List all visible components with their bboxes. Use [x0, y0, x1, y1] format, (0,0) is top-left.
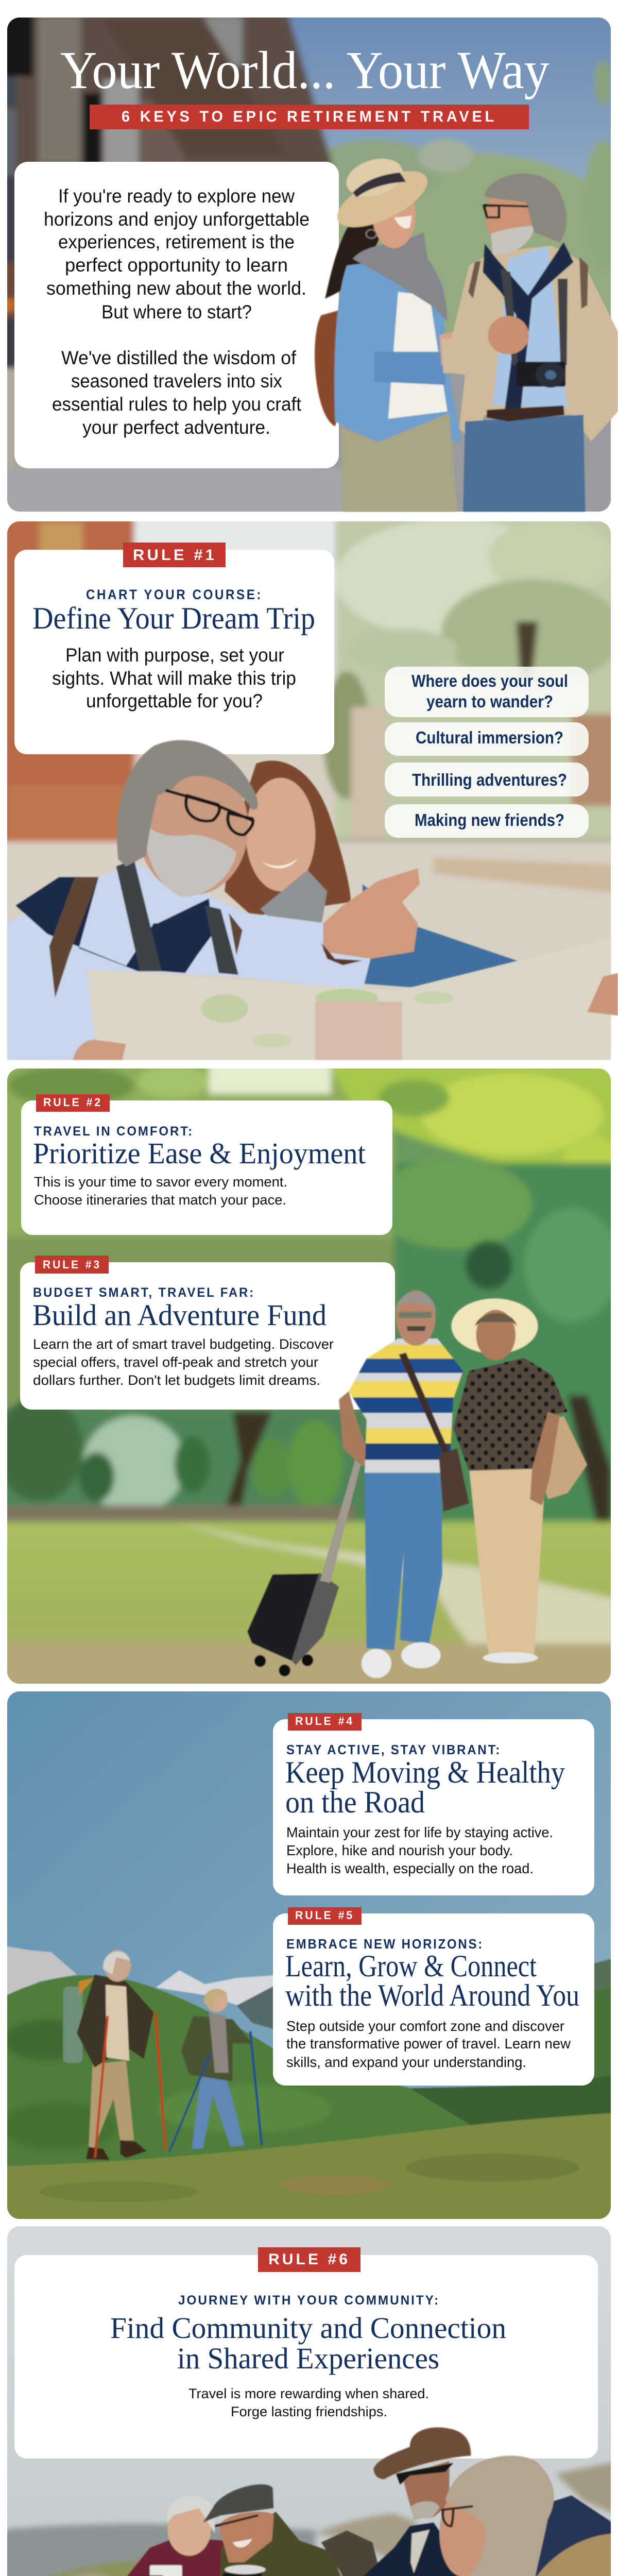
card text: Plan with purpose, set your — [65, 645, 284, 666]
intro text: something new about the world. — [46, 278, 306, 299]
white card: rule 4 — [273, 1719, 594, 1895]
rule 4 content: Keep Moving & Healthy — [285, 1755, 565, 1789]
card text: sights. What will make this trip — [52, 668, 296, 689]
rule 4 content: STAY ACTIVE, STAY VIBRANT: — [286, 1742, 501, 1757]
panel: rules 4 and 5 — [7, 1691, 611, 2219]
intro text: But where to start? — [101, 301, 252, 323]
intro text: experiences, retirement is the — [58, 231, 295, 252]
photo: couple reading a map — [7, 740, 618, 1060]
rule tag — [123, 543, 226, 567]
suitcase — [248, 1454, 364, 1676]
photo: friends sharing a toast — [127, 2427, 611, 2576]
card text: JOURNEY WITH YOUR COMMUNITY: — [178, 2293, 440, 2308]
photo background: plaza with brick building and trees — [0, 515, 618, 1062]
rule tag — [258, 2247, 360, 2272]
rule 3 content — [32, 1256, 334, 1388]
man — [7, 740, 420, 1060]
rule 2 content: This is your time to savor every moment. — [34, 1174, 287, 1190]
panel: rules 2 and 3 — [7, 1069, 611, 1684]
card text: CHART YOUR COURSE: — [86, 587, 263, 602]
hiker man — [63, 1950, 167, 2160]
rule 2 content — [33, 1094, 366, 1208]
rule 4 content: on the Road — [285, 1785, 425, 1819]
rule 5 content: Learn, Grow & Connect — [285, 1949, 537, 1983]
rule 2 content: Choose itineraries that match your pace. — [34, 1192, 286, 1208]
question pills: Cultural immersion? — [416, 728, 563, 747]
card text: in Shared Experiences — [177, 2342, 439, 2375]
man in olive jacket — [203, 2483, 342, 2576]
intro text: perfect opportunity to learn — [65, 255, 288, 276]
woman — [315, 151, 475, 512]
card text: Travel is more rewarding when shared. — [188, 2386, 429, 2401]
white card: rule 2 — [21, 1100, 392, 1235]
subtitle banner — [90, 105, 529, 129]
woman in burgundy — [127, 2496, 225, 2576]
white card: rule 5 — [273, 1913, 594, 2086]
rule 4 content: Explore, hike and nourish your body. — [286, 1842, 513, 1858]
rule 2 content: TRAVEL IN COMFORT: — [34, 1124, 194, 1139]
card text: Define Your Dream Trip — [32, 601, 315, 635]
panel: rule 1 — [6, 521, 618, 1061]
question pills: Thrilling adventures? — [412, 770, 567, 789]
title: Your World... Your Way — [60, 41, 550, 100]
panel: rule 6 — [7, 2226, 611, 2576]
rule 5 content: skills, and expand your understanding. — [286, 2054, 526, 2070]
rule 4 content — [285, 1713, 565, 1876]
white card — [14, 550, 334, 754]
rule 5 content: the transformative power of travel. Learn new — [286, 2036, 571, 2052]
question pills — [385, 667, 589, 838]
photo background: sunny park — [0, 1061, 618, 1687]
rule 3 content: RULE #3 — [43, 1258, 101, 1271]
intro text — [44, 185, 310, 438]
man — [339, 1290, 469, 1678]
rule 2 content: Prioritize Ease & Enjoyment — [33, 1137, 366, 1170]
photo background: misty hills and rocks — [0, 2215, 618, 2576]
question pills: Where does your soul — [411, 671, 568, 690]
card text — [110, 2293, 506, 2419]
rule 5 content: EMBRACE NEW HORIZONS: — [286, 1936, 484, 1952]
man — [441, 174, 618, 512]
rule 5 content: Step outside your comfort zone and discover — [286, 2018, 564, 2034]
rule 5 content — [285, 1907, 579, 2070]
rule tag: RULE #6 — [268, 2251, 350, 2268]
photo: couple with suitcase — [248, 1290, 587, 1678]
intro text: If you're ready to explore new — [58, 185, 295, 207]
intro text: your perfect adventure. — [82, 417, 270, 438]
rule 5 content: with the World Around You — [285, 1978, 579, 2012]
rule 2 content: RULE #2 — [43, 1096, 102, 1109]
rule 4 content: RULE #4 — [295, 1715, 354, 1727]
man in navy jacket and brown hat — [294, 2427, 471, 2576]
rule 4 content: Health is wealth, especially on the road. — [286, 1860, 534, 1876]
woman — [225, 760, 548, 987]
question pills: Making new friends? — [415, 810, 564, 829]
rule 3 content: special offers, travel off-peak and stretch your — [33, 1354, 318, 1370]
rule 3 content: Build an Adventure Fund — [32, 1298, 327, 1332]
photo background: blurred street — [0, 0, 618, 514]
white card — [14, 2255, 598, 2459]
woman — [451, 1298, 587, 1664]
rule 3 content: dollars further. Don't let budgets limit dreams. — [33, 1372, 320, 1388]
question pills: yearn to wander? — [426, 692, 553, 711]
card text: Forge lasting friendships. — [231, 2404, 387, 2419]
intro text: essential rules to help you craft — [52, 394, 302, 415]
subtitle banner: 6 KEYS TO EPIC RETIREMENT TRAVEL — [122, 108, 497, 125]
rule 3 content: Learn the art of smart travel budgeting. Discover — [33, 1336, 334, 1352]
front mug and hand — [222, 2565, 323, 2576]
intro text box — [14, 162, 339, 468]
white card: rule 3 — [20, 1262, 395, 1410]
rule 5 content: RULE #5 — [295, 1909, 354, 1922]
rule 3 content: BUDGET SMART, TRAVEL FAR: — [33, 1285, 255, 1300]
map — [73, 938, 618, 1060]
backpack — [321, 2531, 379, 2576]
rule 4 content: Maintain your zest for life by staying active. — [286, 1824, 553, 1840]
photo background: mountains, hillside and hikers — [0, 1685, 618, 2223]
card text — [32, 587, 315, 711]
card text: Find Community and Connection — [110, 2311, 506, 2345]
intro text: horizons and enjoy unforgettable — [44, 209, 310, 230]
card text: unforgettable for you? — [86, 690, 263, 711]
rule tag: RULE #1 — [133, 547, 217, 564]
woman in foreground — [284, 2455, 618, 2576]
photo: smiling traveler couple — [315, 151, 618, 512]
intro text: We've distilled the wisdom of — [61, 347, 297, 368]
panel: hero — [7, 18, 618, 513]
intro text: seasoned travelers into six — [71, 370, 282, 392]
hiker woman — [168, 1989, 263, 2152]
